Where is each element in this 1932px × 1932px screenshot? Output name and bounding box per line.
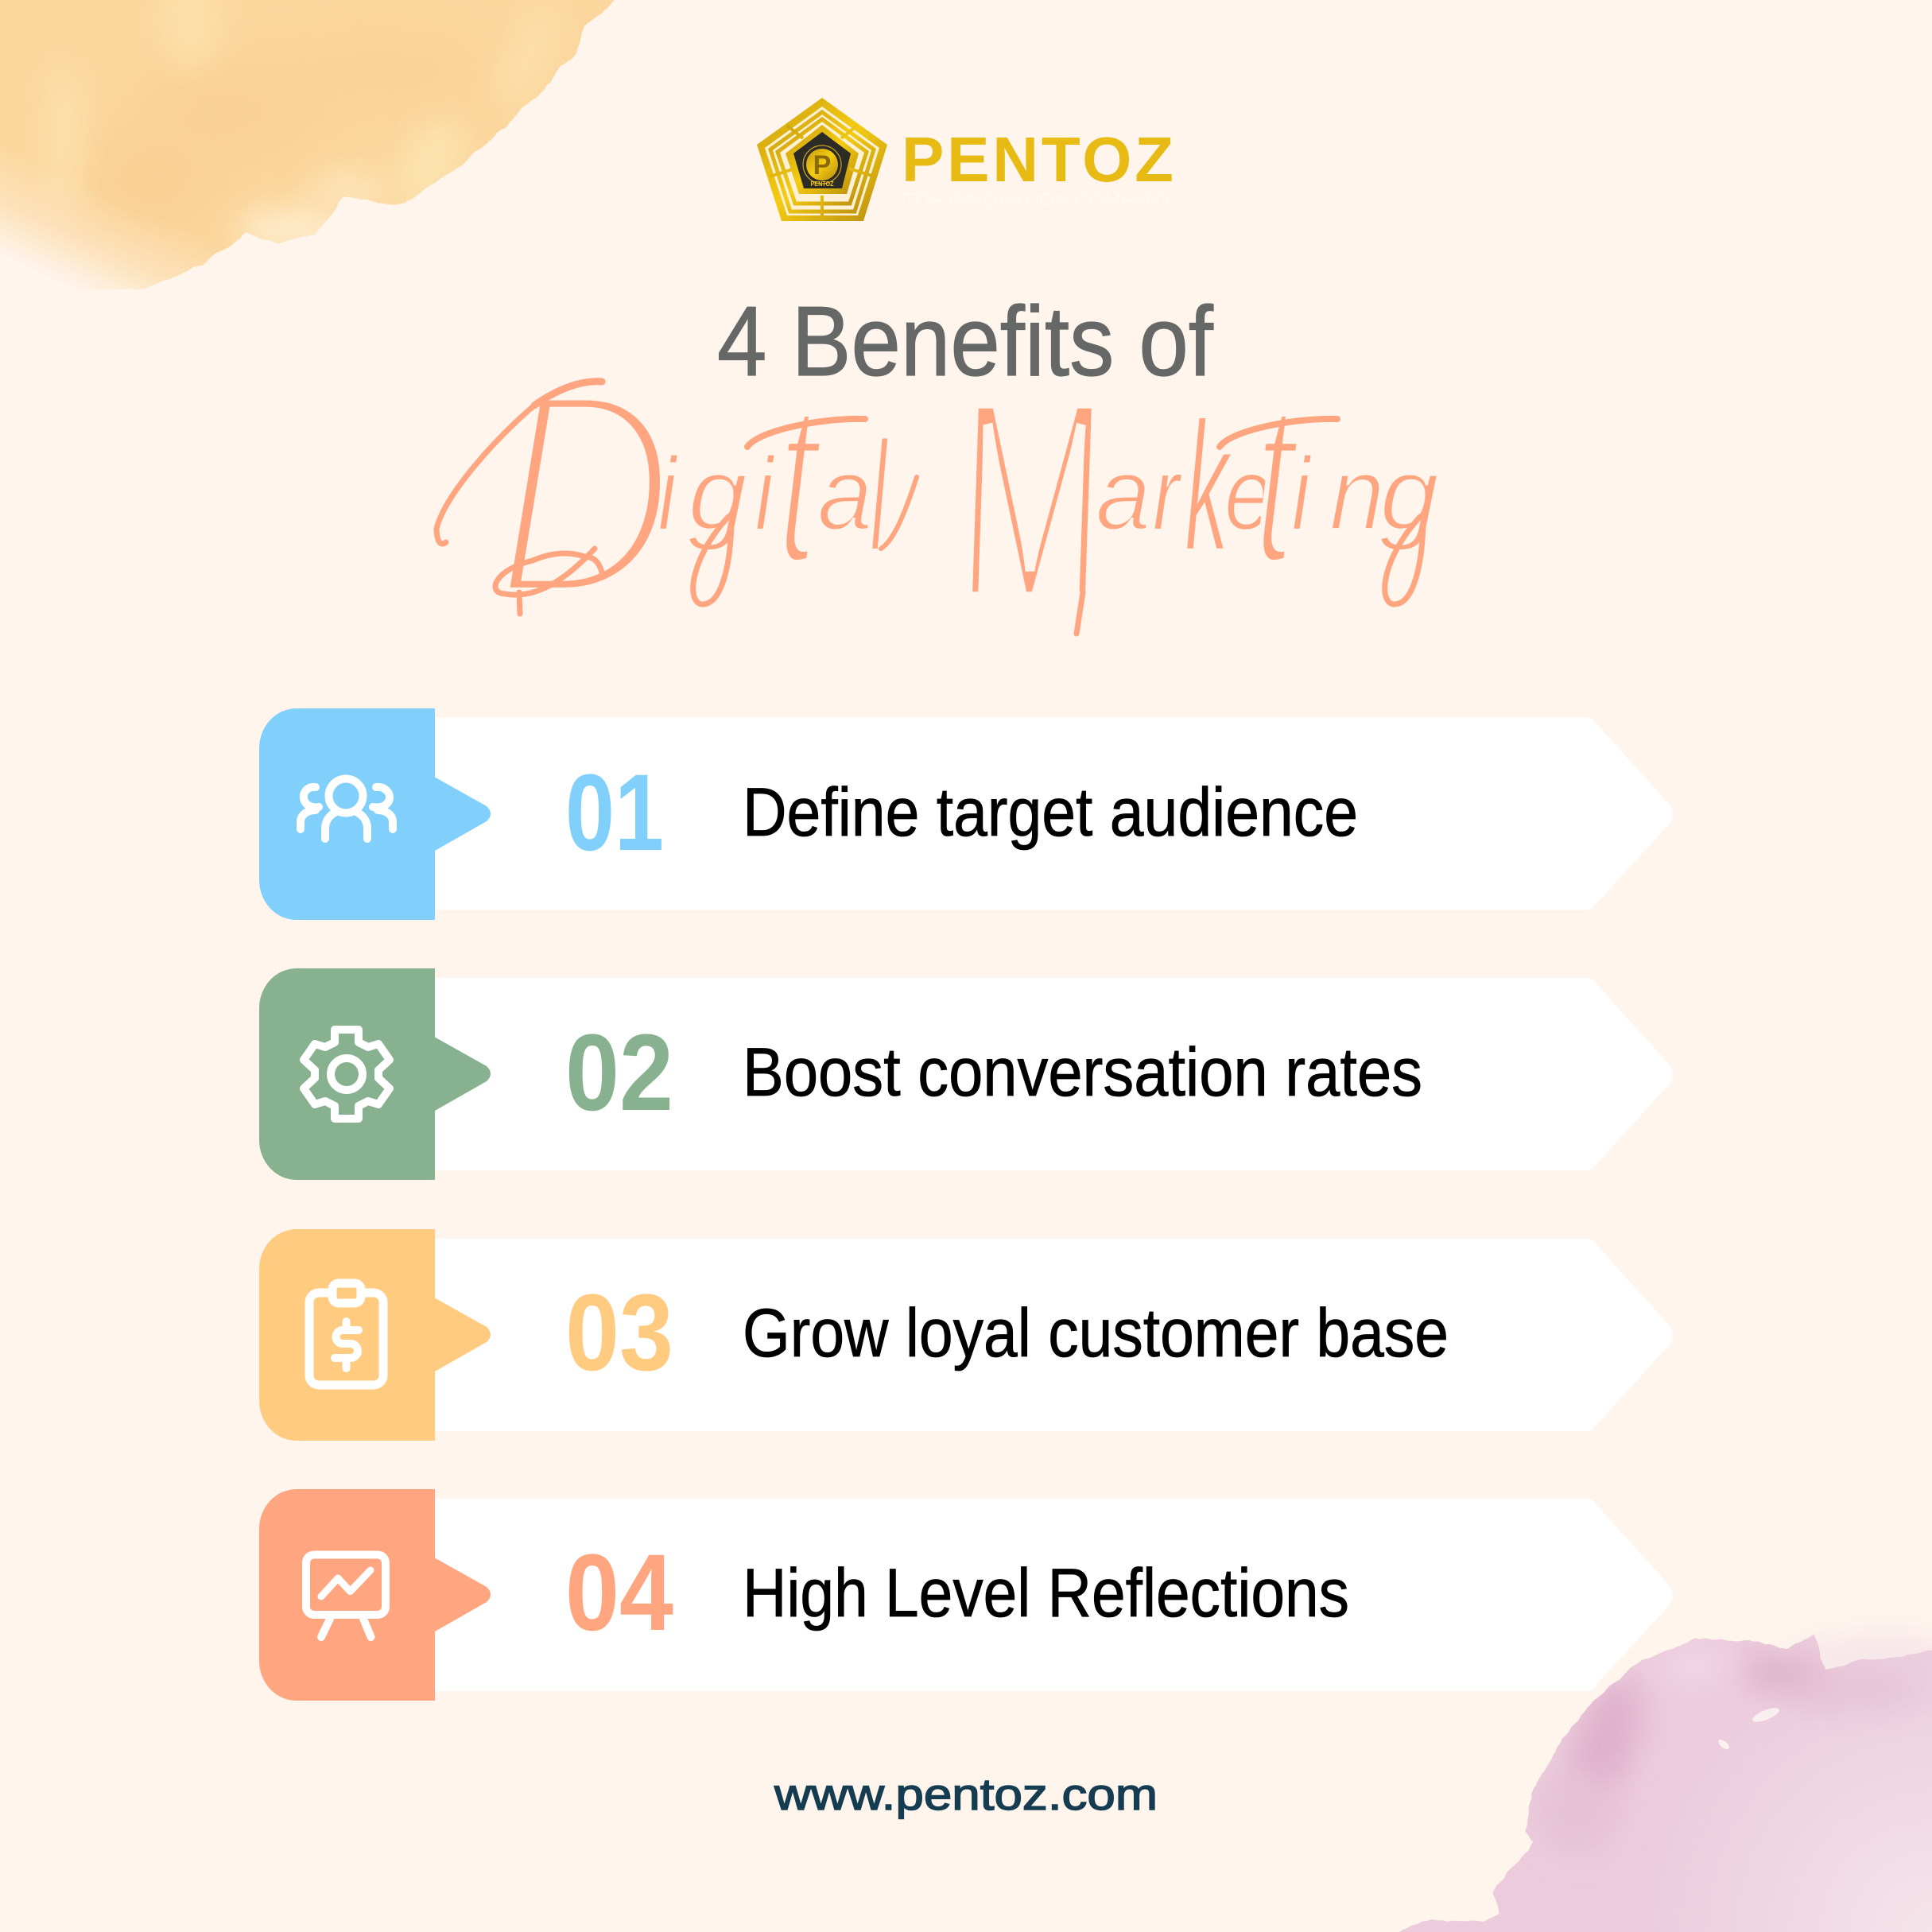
logo emblem: gold pentagon: PENTOZ	[811, 180, 834, 188]
label: Grow loyal customer base	[743, 1295, 1449, 1371]
logo: Pentoz	[757, 98, 1174, 221]
row 4: High Level Reflections	[259, 1489, 1673, 1701]
title: Digital Marketing script: a	[1096, 436, 1151, 553]
title: Digital Marketing script: e	[1224, 436, 1273, 553]
icon: presentation chart	[306, 1555, 386, 1637]
footer: website url: www.pentoz.com	[774, 1769, 1158, 1819]
label: Boost conversation rates	[743, 1034, 1422, 1111]
title: Digital Marketing script: r	[1153, 436, 1179, 553]
logo wordmark: PENTOZ	[902, 124, 1174, 195]
row 3 white arrow bar	[435, 1239, 1673, 1431]
number 03: 03	[565, 1272, 673, 1394]
label: High Level Reflections	[743, 1555, 1349, 1631]
row 1: Define target audience	[259, 708, 1673, 920]
row 3: Grow loyal customer base	[259, 1229, 1673, 1441]
row 4 salmon icon tile	[259, 1489, 491, 1701]
title: Digital Marketing script: i	[755, 436, 773, 553]
number 02: 02	[565, 1012, 673, 1134]
title: Digital Marketing script: g	[1379, 436, 1439, 553]
logo emblem: gold pentagon: P	[813, 150, 831, 180]
title: Digital Marketing script: i	[658, 436, 676, 553]
title: Digital Marketing script: t	[1255, 354, 1294, 611]
row 1 white arrow bar	[435, 717, 1673, 910]
row 2 green icon tile	[259, 968, 491, 1180]
title: Digital Marketing script	[434, 329, 1439, 661]
label: Define target audience	[743, 774, 1358, 851]
row 4 white arrow bar	[435, 1499, 1673, 1691]
decorative script swashes	[434, 378, 1426, 636]
title: 4 Benefits of: 4 Benefits of	[717, 287, 1213, 397]
title: Digital Marketing script: M	[950, 339, 1114, 661]
icon: clipboard with dollar	[309, 1283, 383, 1385]
number 04: 04	[565, 1532, 673, 1654]
title: Digital Marketing script: i	[1292, 436, 1309, 553]
title: Digital Marketing script: n	[1329, 436, 1385, 553]
icon: people	[301, 779, 393, 839]
icon: gear	[304, 1030, 390, 1119]
title: Digital Marketing script: a	[817, 436, 873, 553]
watercolor blob: bottom right pink	[1383, 1614, 1932, 1932]
title: Digital Marketing script: k	[1185, 382, 1229, 590]
title: Digital Marketing script: D	[495, 329, 674, 658]
title: Digital Marketing script: t	[778, 354, 817, 611]
logo emblem: black core	[793, 132, 851, 188]
logo tagline: TOP INNOVATION COMPANY	[903, 190, 1174, 210]
logo emblem: gold pentagon	[757, 98, 887, 221]
row 2: Boost conversation rates	[259, 968, 1673, 1180]
title: Digital Marketing script: l	[871, 410, 886, 584]
title: Digital Marketing script: g	[688, 436, 747, 553]
watercolor blob: top left yellow	[0, 0, 615, 291]
row 2 white arrow bar	[435, 978, 1673, 1170]
row 1 blue icon tile	[259, 708, 491, 920]
number 01: 01	[565, 752, 664, 874]
row 3 orange icon tile	[259, 1229, 491, 1441]
